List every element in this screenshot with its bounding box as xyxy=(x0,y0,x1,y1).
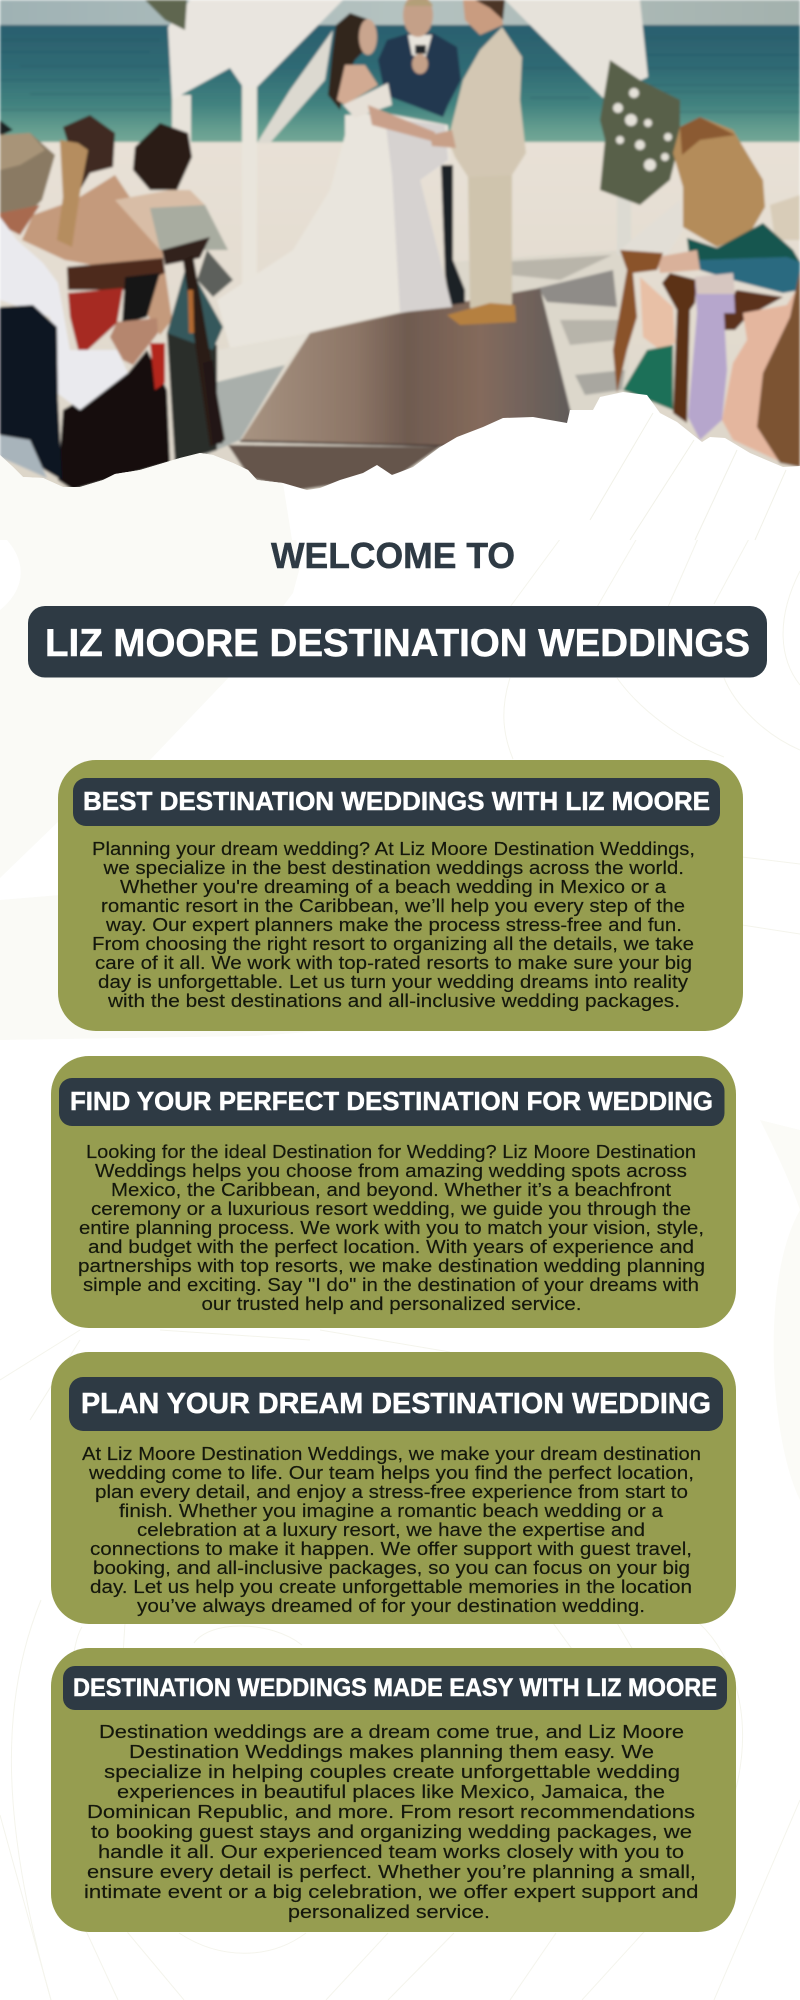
panel: best destination weddings xyxy=(58,760,743,1031)
body text: ensure every detail is perfect. Whether you’re planning a small, xyxy=(87,1862,696,1882)
body text: Whether you're dreaming of a beach wedding in Mexico or a xyxy=(120,877,667,897)
groom head xyxy=(463,0,503,35)
body text: our trusted help and personalized service. xyxy=(202,1294,582,1314)
bride shoulders xyxy=(337,65,378,105)
far right guest xyxy=(722,283,800,467)
woman in red back xyxy=(22,175,172,335)
body text: entire planning process. We work with you to match your vision, style, xyxy=(79,1218,704,1238)
body text: to booking guest stays and organizing wedding packages, we xyxy=(91,1822,692,1842)
teal jacket xyxy=(698,257,800,293)
body text xyxy=(82,1444,701,1616)
body text: handle it all. Our experienced team works closely with you to xyxy=(98,1842,684,1862)
heading bar: FIND YOUR PERFECT DESTINATION FOR WEDDING xyxy=(70,1086,713,1116)
arm xyxy=(640,277,675,350)
dark chair xyxy=(662,273,697,423)
body text: Planning your dream wedding? At Liz Moore Destination Weddings, xyxy=(92,839,695,859)
ponytail hair xyxy=(63,115,115,190)
body text: day is unforgettable. Let us turn your wedding dreams into reality xyxy=(98,972,688,992)
wedding ceremony photo xyxy=(0,0,800,502)
veil streamer xyxy=(257,30,333,143)
body text: Weddings helps you choose from amazing wedding spots across xyxy=(95,1161,687,1181)
body text: you’ve always dreamed of for your destination wedding. xyxy=(137,1596,645,1616)
grey fabric on floor xyxy=(205,365,285,455)
white shirt xyxy=(0,217,128,410)
right drape xyxy=(505,0,648,98)
body text: day. Let us help you create unforgettable memories in the location xyxy=(90,1577,692,1597)
dark lower xyxy=(58,350,170,490)
body text: From choosing the right resort to organizing all the details, we take xyxy=(92,934,694,954)
body text xyxy=(92,839,695,1011)
navy jacket xyxy=(0,305,62,480)
background pattern shapes xyxy=(0,413,800,2000)
body text: Looking for the ideal Destination for Wedding? Liz Moore Destination xyxy=(86,1142,696,1162)
heading: welcome to: WELCOME TO xyxy=(271,535,515,576)
groom shoes xyxy=(447,303,516,325)
upper skin xyxy=(657,250,700,273)
grey chair xyxy=(0,435,47,478)
heading bar xyxy=(73,778,720,826)
heading bar: DESTINATION WEDDINGS MADE EASY WITH LIZ MOORE xyxy=(73,1674,717,1702)
torn edge tint xyxy=(0,453,292,540)
body text: Destination weddings are a dream come true, and Liz Moore xyxy=(99,1722,684,1742)
left greenery xyxy=(145,0,187,30)
wedding dress and train xyxy=(217,113,452,348)
woman three back xyxy=(115,190,205,250)
heading bar: PLAN YOUR DREAM DESTINATION WEDDING xyxy=(81,1388,711,1420)
man head xyxy=(0,133,55,222)
heading bar: BEST DESTINATION WEDDINGS WITH LIZ MOORE xyxy=(83,786,710,816)
heading bar xyxy=(63,1666,727,1710)
body text: connections to make it happen. We offer support with guest travel, xyxy=(90,1539,692,1559)
body text: wedding come to life. Our team helps you find the perfect location, xyxy=(88,1463,694,1483)
body text: plan every detail, and enjoy a stress-free experience from start to xyxy=(95,1482,688,1502)
left drape xyxy=(168,0,343,100)
body text: experiences in beautiful places like Mexico, Jamaica, the xyxy=(117,1782,665,1802)
body text: celebration at a luxury resort, we have the expertise and xyxy=(137,1520,645,1540)
officiant legs xyxy=(441,165,465,305)
body text xyxy=(78,1142,705,1314)
sea xyxy=(0,25,800,147)
torn edge lines xyxy=(590,413,786,540)
body text: simple and exciting. Say "I do" in the destination of your dreams with xyxy=(83,1275,699,1295)
body text: At Liz Moore Destination Weddings, we make your dream destination xyxy=(82,1444,701,1464)
wooden chair xyxy=(613,250,663,393)
body text: partnerships with top resorts, we make destination wedding planning xyxy=(78,1256,705,1276)
sea ripples xyxy=(0,38,800,112)
groom jacket xyxy=(448,27,526,177)
body text: finish. Whether you imagine a romantic beach wedding or a xyxy=(119,1501,664,1521)
groom trousers xyxy=(468,175,512,308)
right guests xyxy=(770,195,800,240)
body text: intimate event or a big celebration, we offer expert support and xyxy=(84,1882,698,1902)
body text: specialize in helping couples create unforgettable wedding xyxy=(104,1762,680,1782)
body text: Destination Weddings makes planning them easy. We xyxy=(129,1742,654,1762)
panel: plan your dream destination wedding xyxy=(51,1352,736,1624)
body text xyxy=(84,1722,698,1922)
body text: personalized service. xyxy=(288,1902,490,1922)
body text: booking, and all-inclusive packages, so you can focus on your big xyxy=(93,1558,690,1578)
bride hair xyxy=(328,13,375,110)
canopy posts xyxy=(172,95,191,143)
body text: we specialize in the best destination weddings across the world. xyxy=(102,858,684,878)
body text: ceremony or a luxurious resort wedding, we guide you through the xyxy=(91,1199,691,1219)
heading bar xyxy=(69,1377,723,1431)
wooden chair left xyxy=(162,237,210,265)
green collar xyxy=(687,223,800,262)
heading bar xyxy=(59,1078,724,1126)
body text: Mexico, the Caribbean, and beyond. Whether it’s a beachfront xyxy=(111,1180,671,1200)
sand xyxy=(0,142,800,502)
right flowers xyxy=(600,60,680,205)
body text: with the best destinations and all-inclusive wedding packages. xyxy=(107,991,680,1011)
torn paper edge xyxy=(0,392,800,540)
purple blanket xyxy=(688,273,735,440)
body text: way. Our expert planners make the process stress-free and fun. xyxy=(105,915,682,935)
title text: LIZ MOORE DESTINATION WEDDINGS xyxy=(45,622,750,665)
left guests xyxy=(0,120,13,136)
body text: romantic resort in the Caribbean, we’ll help you every step of the xyxy=(101,896,685,916)
wooden aisle floor xyxy=(240,288,574,447)
title bar xyxy=(28,606,767,678)
panel: destination weddings made easy xyxy=(51,1648,736,1932)
green skirt xyxy=(623,345,673,410)
walkway side sand xyxy=(450,250,630,420)
body text: care of it all. We work with top-rated resorts to make sure your big xyxy=(95,953,692,973)
blond hair xyxy=(673,117,765,247)
body text: and budget with the perfect location. With years of experience and xyxy=(88,1237,694,1257)
panel: find your perfect destination xyxy=(51,1056,736,1328)
body text: Dominican Republic, and more. From resort recommendations xyxy=(87,1802,695,1822)
sky xyxy=(0,0,800,27)
officiant xyxy=(378,33,461,117)
